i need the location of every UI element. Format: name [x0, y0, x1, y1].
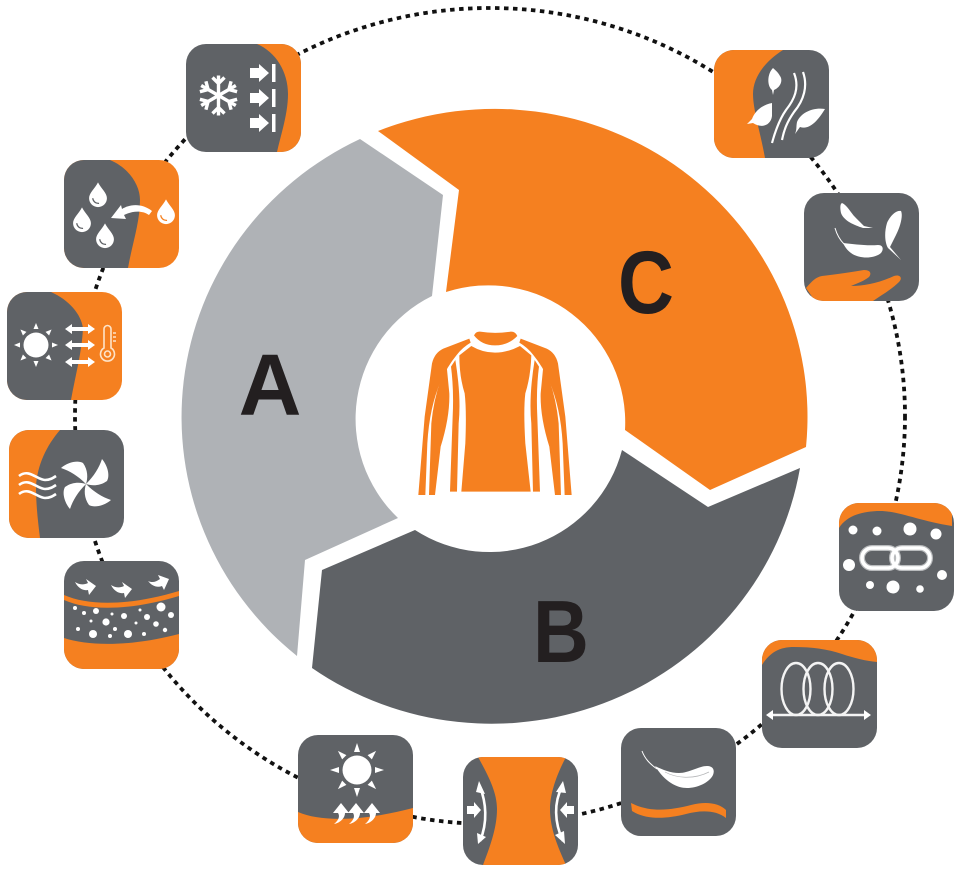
- coils: [770, 663, 868, 715]
- shirt torso: [459, 346, 531, 492]
- curved arrow: [111, 205, 152, 219]
- icon: shirt: [418, 332, 572, 495]
- right arrows: [555, 781, 574, 844]
- blocked arrows: [250, 64, 276, 132]
- snowflake: [198, 76, 239, 116]
- icon: wind and fan: [9, 430, 124, 538]
- water drops: [73, 182, 175, 248]
- label A: A: [239, 337, 301, 434]
- icon: leaves in breeze: [714, 50, 829, 158]
- shirt right side: [519, 339, 572, 495]
- icon: feather softness: [621, 728, 736, 836]
- icon: moisture transfer drops: [64, 160, 179, 268]
- hand: [806, 270, 901, 301]
- left arrows: [467, 781, 486, 844]
- segment A: [182, 139, 443, 656]
- wind waves: [19, 473, 56, 498]
- segment C: [378, 109, 808, 490]
- icon: sun with upward heat arrows: [298, 735, 413, 843]
- icon: chain link with dots: [839, 503, 954, 611]
- shirt collar: [474, 332, 517, 345]
- label C: C: [618, 232, 674, 332]
- fan blades: [61, 459, 111, 509]
- sun: [330, 743, 384, 797]
- dots: [73, 602, 174, 638]
- wind lines: [772, 72, 805, 143]
- chain link: [862, 548, 930, 568]
- thermometer: [100, 326, 116, 361]
- icon: feathers over hand: [804, 193, 919, 301]
- double arrows: [65, 324, 95, 367]
- icon: sun and thermometer: [7, 292, 122, 400]
- icon: layers with airflow: [64, 561, 179, 669]
- feather: [642, 751, 714, 788]
- icon: stretch compression: [463, 757, 578, 865]
- segment B: [312, 450, 800, 724]
- leaves: [747, 68, 825, 134]
- shirt left side: [418, 339, 471, 495]
- sun: [14, 323, 58, 367]
- icon: snowflake and blocking arrows: [186, 44, 301, 152]
- base arrowheads: [766, 710, 871, 720]
- flow arrows: [75, 575, 169, 598]
- dots: [843, 522, 947, 594]
- icon: coil loops: [762, 640, 877, 748]
- label B: B: [533, 582, 589, 681]
- feathers: [835, 203, 902, 260]
- orange wave: [631, 803, 726, 818]
- heat arrows: [333, 803, 380, 824]
